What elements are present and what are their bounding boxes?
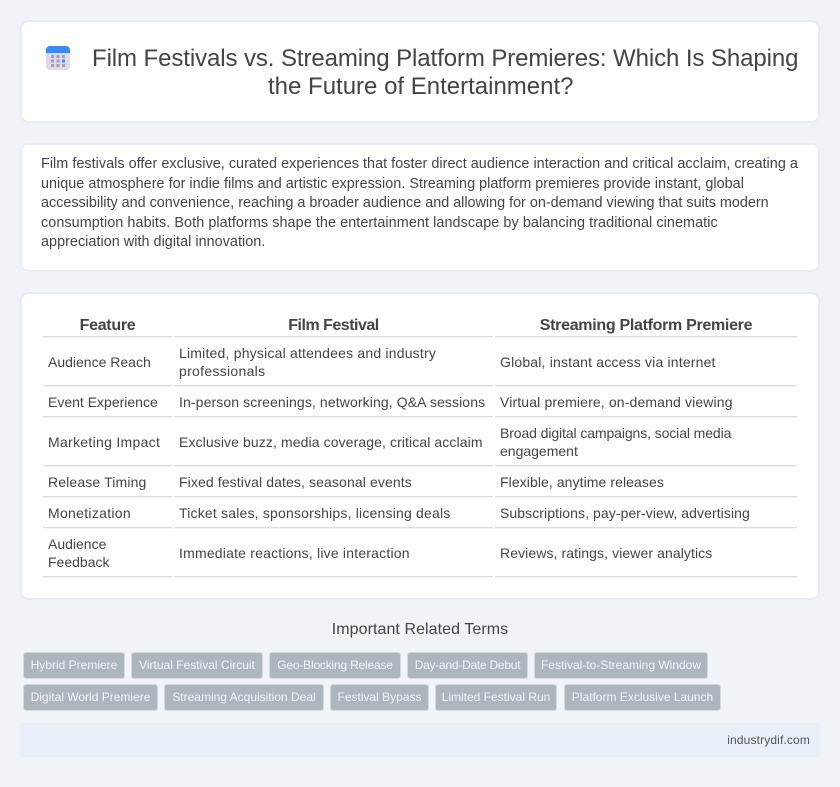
cell: Limited, physical attendees and industry — [179, 345, 436, 361]
heading: related terms: Important Related Terms — [332, 621, 508, 638]
tag — [330, 684, 429, 711]
cell — [500, 425, 732, 459]
title — [92, 45, 798, 100]
row: Audience Feedback: Audience — [48, 536, 106, 552]
tag — [534, 652, 708, 679]
panel: header — [20, 20, 820, 123]
cell: Broad digital campaigns, social media — [500, 425, 731, 441]
tag — [435, 684, 557, 711]
row: Audience Feedback: Feedback — [48, 554, 109, 570]
table header: Streaming Platform Premiere: Streaming Platform Premiere — [540, 317, 752, 334]
tag: Virtual Festival Circuit — [139, 658, 255, 672]
title: the Future of Entertainment? — [268, 73, 574, 100]
panel: summary — [20, 143, 820, 272]
summary text: unique atmosphere for indie films and artistic expression. Streaming platform premieres provide instant, global — [41, 176, 744, 192]
cell: Subscriptions, pay-per-view, advertising — [500, 505, 750, 521]
tag: Digital World Premiere — [31, 690, 150, 704]
tag: Platform Exclusive Launch — [572, 690, 713, 704]
tag — [131, 652, 263, 679]
summary text: appreciation with digital innovation. — [41, 234, 265, 250]
tag — [564, 684, 721, 711]
tag: Streaming Acquisition Deal — [172, 690, 316, 704]
footer text: industrydif.com — [727, 733, 810, 747]
row: Monetization: Monetization — [48, 505, 131, 521]
cell: Fixed festival dates, seasonal events — [179, 474, 412, 490]
cell: professionals — [179, 363, 265, 379]
cell — [179, 345, 436, 379]
tag — [23, 684, 158, 711]
row: Event Experience: Event Experience — [48, 394, 158, 410]
tag: Day-and-Date Debut — [415, 658, 520, 672]
tag — [23, 652, 125, 679]
panel: comparison table — [20, 292, 820, 600]
tag: Hybrid Premiere — [31, 658, 117, 672]
cell: Reviews, ratings, viewer analytics — [500, 545, 712, 561]
summary text: Film festivals offer exclusive, curated experiences that foster direct audience interaction and critical acclaim, creating a — [41, 156, 798, 172]
cell: Immediate reactions, live interaction — [179, 545, 410, 561]
tag: Festival-to-Streaming Window — [541, 658, 701, 672]
summary text: consumption habits. Both platforms shape the entertainment landscape by balancing traditional cinematic — [41, 214, 718, 230]
tag: Festival Bypass — [337, 690, 422, 704]
row: Audience Reach: Audience Reach — [48, 354, 151, 370]
row: Release Timing: Release Timing — [48, 474, 146, 490]
cell: Exclusive buzz, media coverage, critical acclaim — [179, 434, 483, 450]
title: Film Festivals vs. Streaming Platform Premieres: Which Is Shaping — [92, 45, 798, 72]
row: Marketing Impact: Marketing Impact — [48, 434, 160, 450]
table header: Film Festival: Film Festival — [288, 317, 379, 334]
cell: Global, instant access via internet — [500, 354, 716, 370]
tag — [269, 652, 401, 679]
summary text — [41, 156, 798, 250]
cell: Ticket sales, sponsorships, licensing deals — [179, 505, 450, 521]
tag — [164, 684, 324, 711]
cell: engagement — [500, 443, 578, 459]
tag: Geo-Blocking Release — [277, 658, 393, 672]
tag: Limited Festival Run — [442, 690, 550, 704]
cell: In-person screenings, networking, Q&A sessions — [179, 394, 485, 410]
tag — [407, 652, 528, 679]
footer — [20, 723, 820, 757]
cell: Virtual premiere, on-demand viewing — [500, 394, 733, 410]
row: Audience Feedback — [48, 536, 110, 570]
summary text: accessibility and convenience, reaching a broader audience and allowing for on-demand viewing that suits modern — [41, 195, 769, 211]
table header: Feature: Feature — [80, 317, 135, 334]
cell: Flexible, anytime releases — [500, 474, 664, 490]
icon: calendar — [46, 46, 70, 70]
